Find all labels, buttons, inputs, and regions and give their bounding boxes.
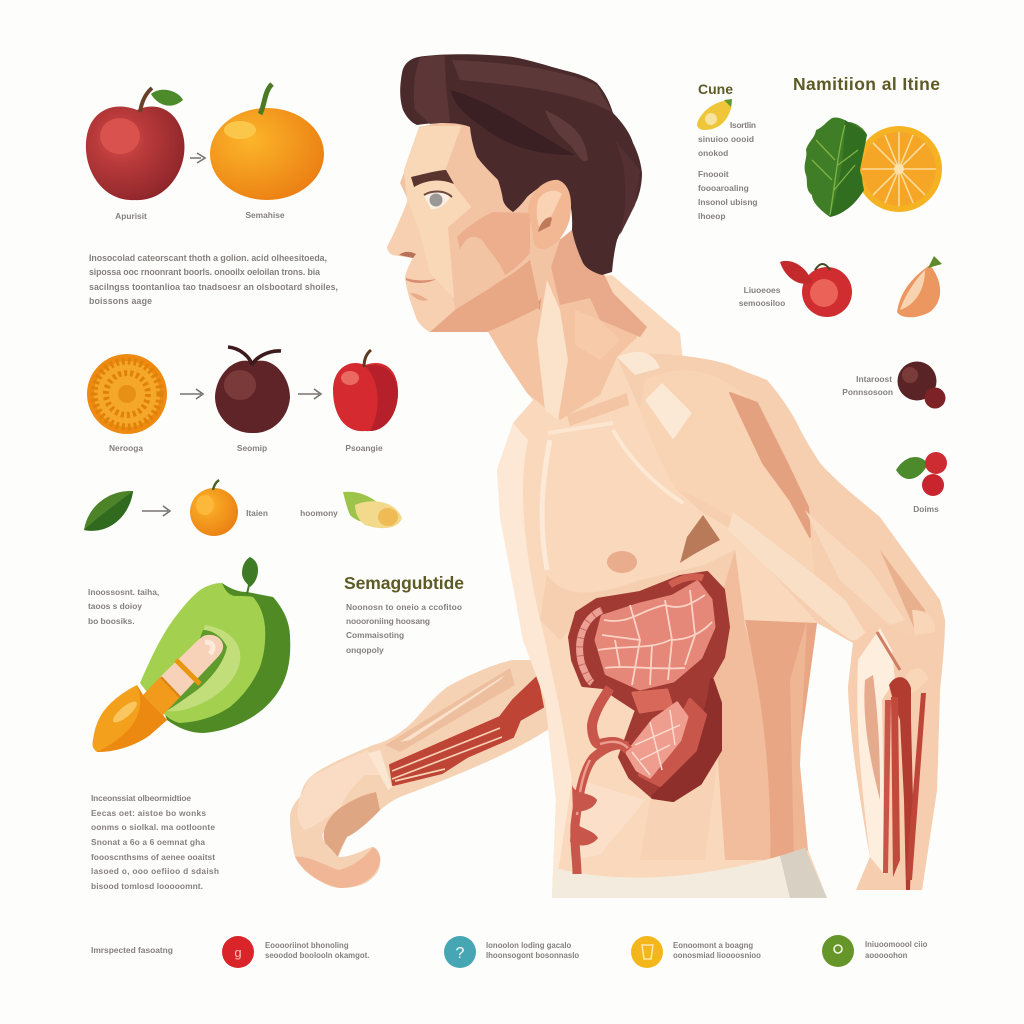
- text block: Semaglutide description: noooroniing hoosang: [346, 616, 430, 626]
- footer: teal badge: [444, 936, 476, 968]
- text block: intro: Inosocolad cateorscant thoth a golion. acid olheesitoeda,: [89, 253, 327, 263]
- illustration: orange fruit: [210, 84, 324, 200]
- text block: lower left note: bo boosiks.: [88, 616, 135, 626]
- footer: yellow badge: [631, 936, 663, 968]
- text block: bottom left paragraph: foooscnthsms of aenee ooaitst: [91, 852, 215, 862]
- footer: red badge text: [265, 941, 369, 960]
- arm muscles: [390, 677, 543, 785]
- footer: red badge: [222, 936, 254, 968]
- text block: Cune text: [698, 120, 758, 221]
- arrow: [190, 153, 205, 163]
- figure: armpit shadow: [680, 515, 720, 563]
- figure: torso: [497, 275, 827, 898]
- illustration: red apple: [333, 350, 398, 431]
- illustration: citrus slice: [87, 354, 167, 434]
- figure: face details: [399, 170, 454, 301]
- figure: head: [387, 115, 575, 332]
- text block: bottom left paragraph: [91, 793, 219, 891]
- text block: Cune text: Insonol ubisng: [698, 197, 758, 207]
- forearm muscles: [889, 677, 913, 890]
- label: Internet Peninsula: Ponnsosoon: [842, 387, 893, 397]
- illustration: plums: [898, 362, 946, 408]
- organ: intestine: [592, 688, 628, 750]
- text block: Cune text: lhoeop: [698, 211, 725, 221]
- illustration: red cherry fruit: [780, 261, 852, 317]
- illustration: apple: [86, 88, 184, 200]
- footer: teal badge: ?: [456, 945, 465, 962]
- footer: green badge text: [865, 940, 928, 960]
- footer: red badge: g: [234, 945, 242, 960]
- text block: lower left note: [88, 587, 159, 626]
- figure: waistband: [552, 848, 827, 898]
- figure: forearm: [848, 610, 945, 890]
- hole between fingers: [322, 823, 343, 857]
- footer: green badge text: aooooohon: [865, 951, 908, 960]
- figure: ear: [528, 180, 571, 249]
- figure: left arm: [290, 660, 552, 888]
- text block: bottom left paragraph: bisood tomlosd looooomnt.: [91, 881, 203, 891]
- text block: bottom left paragraph: lasoed o, ooo oefiioo d sdaish: [91, 866, 219, 876]
- text block: intro: sacilngss toontanlioa tao tnadsoesr an olsbootard shoiles,: [89, 282, 338, 292]
- label: Internet Peninsula: [842, 374, 893, 397]
- text block: lower left note: Inoossosnt. taiha,: [88, 587, 159, 597]
- text block: Semaglutide description: [346, 602, 462, 655]
- label: Sunshine: Semahise: [245, 210, 285, 220]
- illustration: large green apple with capsule: [92, 557, 290, 752]
- footer: yellow badge text: oonosmiad lioooosnioo: [673, 951, 761, 960]
- label: Liberosa: Liuoeoes: [744, 285, 781, 295]
- organ: lower lobes: [627, 703, 687, 777]
- illustration: sliced pear: [343, 492, 402, 528]
- footer: yellow badge text: Eonoomont a boagng: [673, 941, 753, 950]
- text block: intro: sipossa ooc rnoonrant boorls. onooilx oeloilan trons. bia: [89, 267, 320, 277]
- footer: teal badge text: lhoonsogont bosonnaslo: [486, 951, 579, 960]
- organ: stomach body: [570, 573, 728, 800]
- text block: bottom left paragraph: Inceonssiat olbeormidtioe: [91, 793, 191, 803]
- arrow: [298, 389, 321, 399]
- text block: Cune text: sinuioo oooid: [698, 134, 754, 144]
- figure: digestive system: [570, 573, 728, 874]
- illustration: leaf and citrus: [805, 117, 942, 217]
- label: Pineapple: Psoangie: [345, 443, 383, 453]
- label: Liberosa: [739, 285, 785, 308]
- text block: Cune text: Isortlin: [730, 120, 756, 130]
- footer: teal badge text: [486, 941, 579, 960]
- text block: bottom left paragraph: Snonat a 6o a 6 oemnat gha: [91, 837, 205, 847]
- footer: yellow badge text: [673, 941, 761, 960]
- arrow: [142, 506, 170, 516]
- footer: red badge text: Eooooriinot bhonoling: [265, 941, 349, 950]
- illustration: green leaf: [84, 491, 133, 531]
- footer: red badge text: seoodod boolooln okamgot.: [265, 951, 369, 960]
- figure: right shoulder and arm: [617, 354, 945, 890]
- illustration: dark plum: [215, 347, 290, 433]
- footer: green badge text: Iniuoomoool ciio: [865, 940, 928, 949]
- heading: Nutrition line: Namitiion al Itine: [793, 74, 940, 94]
- figure: man in profile with digestive system: [290, 54, 945, 898]
- label: Nemesa: Nerooga: [109, 443, 143, 453]
- label: Internet Peninsula: Intaroost: [856, 374, 892, 384]
- text block: lower left note: taoos s doioy: [88, 601, 142, 611]
- heading: Semaglutide: Semaggubtide: [344, 573, 464, 593]
- label: Liberosa: semoosiloo: [739, 298, 785, 308]
- figure: neck: [487, 230, 647, 420]
- text block: Cune text: Fnoooit: [698, 169, 729, 179]
- text block: bottom left paragraph: Eecas oet: aistoe bo wonks: [91, 808, 206, 818]
- arrow: [180, 389, 203, 399]
- text block: Semaglutide description: Noonosn to oneio a ccofitoo: [346, 602, 462, 612]
- label: Apricot: Apurisit: [115, 211, 147, 221]
- text block: Semaglutide description: onqopoly: [346, 645, 384, 655]
- illustration: peach slice: [897, 256, 942, 317]
- illustration: small orange: [190, 480, 238, 536]
- footer: first label: Imrspected fasoatng: [91, 945, 173, 955]
- figure: nipple: [607, 551, 637, 573]
- text block: bottom left paragraph: oonms o siolkal. ma ootloonte: [91, 822, 215, 832]
- label: Engen: Itaien: [246, 508, 268, 518]
- text block: Cune text: onokod: [698, 148, 728, 158]
- organ: upper lobes: [597, 583, 713, 688]
- text block: Cune text: foooaroaling: [698, 183, 749, 193]
- illustration: corn: [697, 99, 732, 130]
- organ: inner stomach tissue: [633, 690, 672, 712]
- label: Seeship: Seomip: [237, 443, 267, 453]
- label: Deims: Doims: [913, 504, 939, 514]
- label: Noomay: hoomony: [300, 508, 338, 518]
- text block: Semaglutide description: Commaisoting: [346, 630, 404, 640]
- heading: Cune: Cune: [698, 81, 733, 97]
- text block: intro: [89, 253, 338, 306]
- footer: green badge: [822, 935, 854, 967]
- text block: intro: boissons aage: [89, 296, 152, 306]
- figure: hair: [400, 54, 642, 275]
- illustration: berries and leaf: [896, 452, 947, 496]
- footer: teal badge text: lonoolon loding gacalo: [486, 941, 572, 950]
